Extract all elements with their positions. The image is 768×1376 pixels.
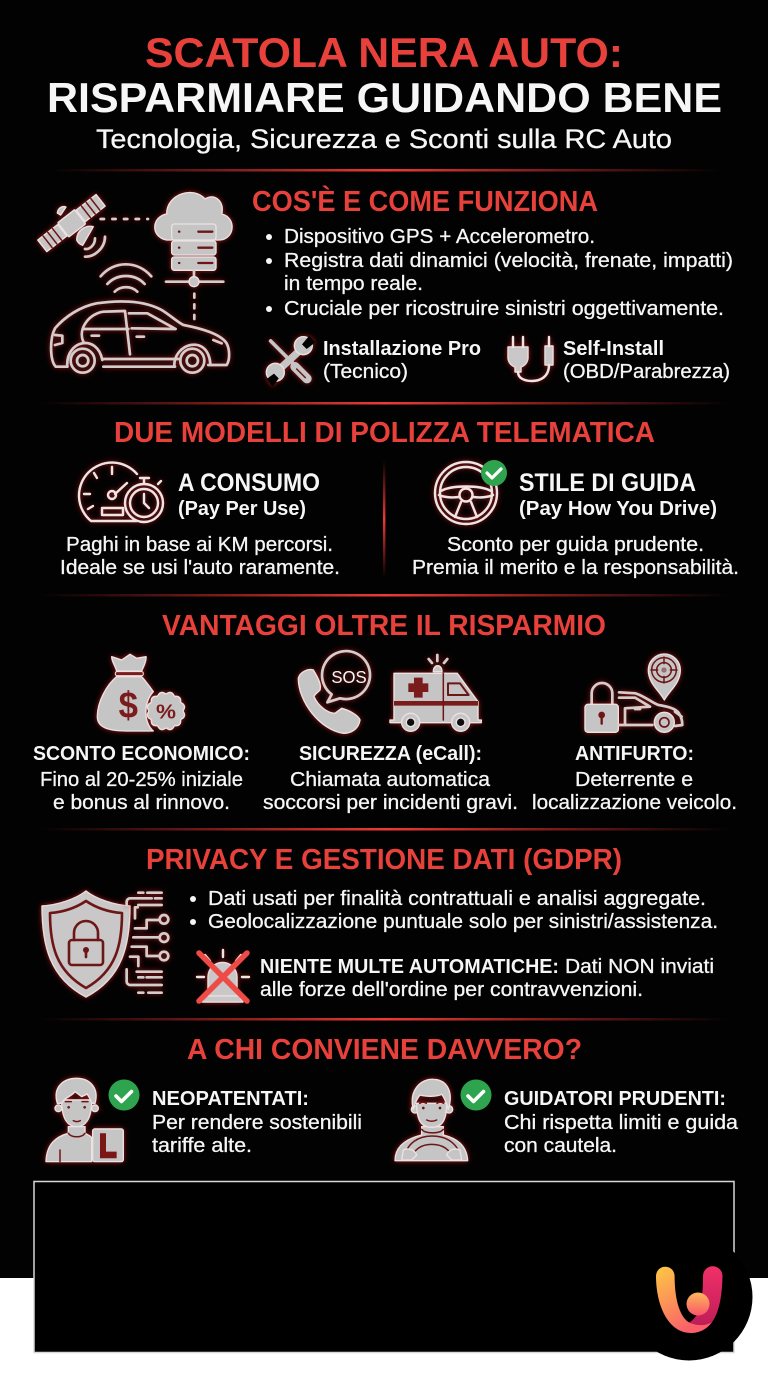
icon: shield with lock [42,891,130,997]
text: sconto economico [33,742,250,814]
text: neopatentati: Per rendere sostenibili [152,1111,362,1134]
heading: PRIVACY E GESTIONE DATI (GDPR) [146,844,622,876]
bullet list: Dispositivo GPS + Accelerometro. [284,225,595,248]
icon: circuit lines [127,893,168,993]
bullet list [266,225,733,320]
label: a consumo [178,469,320,520]
icon: steering wheel with check [435,460,507,524]
text: a consumo description: Ideale se usi l'auto raramente. [60,556,340,579]
icon: phone sos: SOS [331,667,367,687]
icon: careful driver [395,1079,492,1161]
label: self-install [563,337,730,383]
label: stile di guida: (Pay How You Drive) [519,497,717,520]
icon: plug and cable [508,337,553,381]
icon: wifi [101,264,151,292]
text: antifurto [532,742,737,814]
text: antifurto: localizzazione veicolo. [532,791,737,814]
bullet list: Cruciale per ricostruire sinistri oggettivamente. [284,297,724,320]
text: sconto economico: e bonus al rinnovo. [53,791,230,814]
text: antifurto: ANTIFURTO: [575,742,694,765]
heading: COS'È E COME FUNZIONA [252,184,598,218]
text: stile di guida description: Premia il merito e la responsabilità. [412,556,739,579]
bullet list: Geolocalizzazione puntuale solo per sinistri/assistenza. [208,910,718,933]
text: guidatori prudenti: Chi rispetta limiti e guida [504,1111,739,1134]
text: neopatentati [152,1087,362,1157]
text: stile di guida description [412,533,739,579]
text: sicurezza [263,742,518,814]
bullet list: Registra dati dinamici (velocità, frenate, impatti) [284,249,733,272]
bullet list: Dati usati per finalità contrattuali e analisi aggregate. [208,887,706,910]
text: sicurezza: SICUREZZA (eCall): [299,742,482,765]
panel: due modelli [60,417,739,579]
label: installazione pro: (Tecnico) [323,360,408,383]
icon: phone sos [298,651,370,733]
text: antifurto: Deterrente e [575,768,693,791]
text: sicurezza: soccorsi per incidenti gravi. [263,791,518,814]
panel: vantaggi [33,610,737,814]
title: RISPARMIARE GUIDANDO BENE [47,74,722,121]
text: a consumo description: Paghi in base ai KM percorsi. [66,533,333,556]
title [47,29,722,154]
icon: gauge and stopwatch [79,463,163,522]
icon: money bag: $ [119,684,138,726]
empty framed box [34,1182,734,1352]
icon: cloud server [155,193,232,319]
text: sconto economico: Fino al 20-25% iniziale [40,768,243,791]
label: self-install: Self-Install [563,337,664,360]
icon: money bag [97,654,186,731]
callout: niente multe: alle forze dell'ordine per contravvenzioni. [260,978,643,1001]
callout: niente multe [260,955,714,1001]
icon: car [51,301,229,373]
icon: satellite [37,193,148,257]
text: neopatentati: tariffe alte. [152,1134,252,1157]
heading: A CHI CONVIENE DAVVERO? [187,1034,582,1066]
callout: niente multe: NIENTE MULTE AUTOMATICHE: [260,955,559,978]
text: guidatori prudenti: GUIDATORI PRUDENTI: [504,1087,726,1110]
heading: VANTAGGI OLTRE IL RISPARMIO [162,610,606,642]
text: guidatori prudenti: con cautela. [504,1134,617,1157]
label: self-install: (OBD/Parabrezza) [563,360,730,383]
title: SCATOLA NERA AUTO: [145,29,623,76]
icon: ambulance [390,655,481,731]
icon: money bag: % [156,700,176,723]
label: installazione pro [323,337,481,383]
label: stile di guida [519,469,717,520]
icon: tools [266,336,315,387]
panel: cos'è e come funziona [37,184,733,387]
icon: young driver [46,1078,140,1162]
label: installazione pro: Installazione Pro [323,337,481,360]
heading: DUE MODELLI DI POLIZZA TELEMATICA [114,417,655,449]
text: sicurezza: Chiamata automatica [290,768,491,791]
text: stile di guida description: Sconto per guida prudente. [447,533,704,556]
bullet list: in tempo reale. [284,272,423,295]
panel: a chi conviene [46,1034,739,1162]
bullet list [190,887,718,933]
label: stile di guida: STILE DI GUIDA [519,469,696,497]
text: guidatori prudenti [504,1087,739,1157]
text: sconto economico: SCONTO ECONOMICO: [33,742,250,765]
panel: privacy [42,844,718,1002]
text: a consumo description [60,533,340,579]
callout: niente multe: Dati NON inviati [565,955,714,978]
icon: lock car pin [585,654,682,732]
title: Tecnologia, Sicurezza e Sconti sulla RC Auto [96,124,672,154]
text: neopatentati: NEOPATENTATI: [152,1087,309,1110]
icon: crossed siren [197,950,249,1002]
label: a consumo: (Pay Per Use) [178,497,306,520]
logo badge [626,1234,752,1360]
label: a consumo: A CONSUMO [178,469,320,497]
